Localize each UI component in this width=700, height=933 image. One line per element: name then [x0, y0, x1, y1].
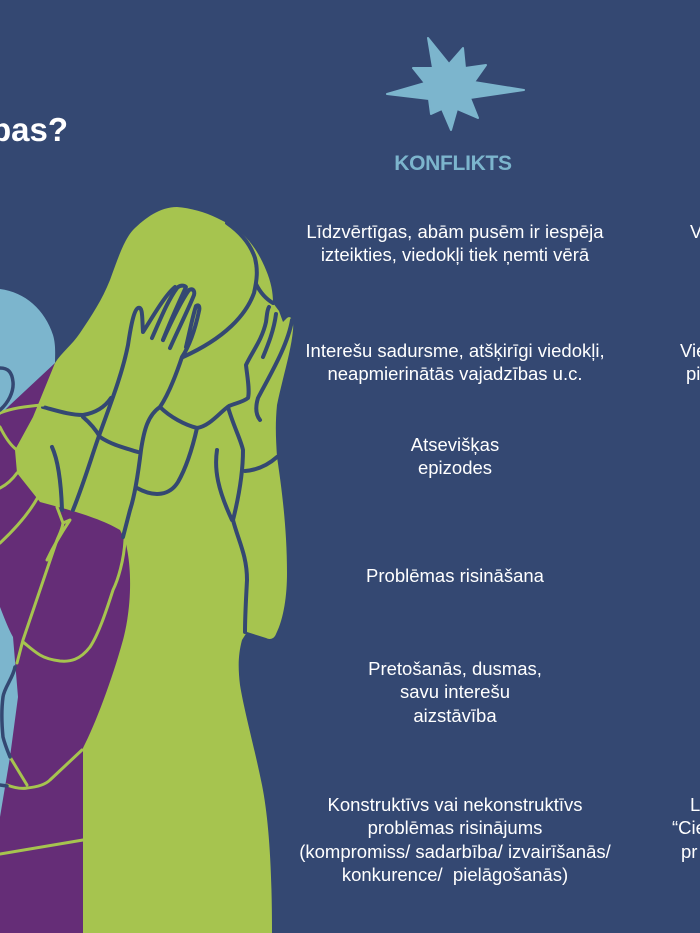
text: cut-off right column, row 6: L: [690, 794, 700, 815]
heading: konflikts: KONFLIKTS: [394, 152, 512, 175]
text: cause: neapmierinātās vajadzības u.c.: [327, 363, 583, 384]
text: reaction: aizstāvība: [413, 705, 497, 726]
text: outcome: problēmas risinājums: [368, 817, 542, 838]
text: relationship of parties: Līdzvērtīgas, abām pusēm ir iespēja: [306, 221, 604, 242]
text: cut-off right column, row 2: [680, 340, 700, 384]
figure: blue lower garment area: [0, 607, 18, 817]
text: cut-off right column, row 2: pi: [686, 363, 700, 384]
text: relationship of parties: [306, 221, 604, 265]
text: frequency: [410, 434, 499, 478]
text: frequency: Atsevišķas: [411, 434, 499, 455]
text: cut-off right column, row 6: [672, 794, 700, 862]
figure: green line work on purple body: [0, 405, 125, 854]
figure: green figure silhouette: [15, 207, 293, 933]
figure: blue head: [0, 289, 55, 415]
figure: navy line work on green figure: [43, 223, 292, 632]
figure: purple body: [0, 363, 140, 933]
text: reaction: [368, 658, 542, 726]
text: reaction: savu interešu: [400, 681, 510, 702]
text: relationship of parties: izteikties, viedokļi tiek ņemti vērā: [321, 244, 589, 265]
figure: navy line work on blue areas: [0, 368, 15, 786]
icon: conflict star burst: [387, 38, 524, 130]
text: cause: [305, 340, 605, 384]
text: outcome: [299, 794, 611, 885]
text: reaction: Pretošanās, dusmas,: [368, 658, 542, 679]
text: frequency: epizodes: [418, 457, 492, 478]
text: goal: Problēmas risināšana: [366, 565, 544, 586]
text: cut-off right column, row 6: pr: [681, 841, 697, 862]
text: outcome: konkurence/ pielāgošanās): [342, 864, 568, 885]
text: cause: Interešu sadursme, atšķirīgi viedokļi,: [305, 340, 605, 361]
text: outcome: (kompromiss/ sadarbība/ izvairīšanās/: [299, 841, 611, 862]
text: outcome: Konstruktīvs vai nekonstruktīvs: [328, 794, 582, 815]
